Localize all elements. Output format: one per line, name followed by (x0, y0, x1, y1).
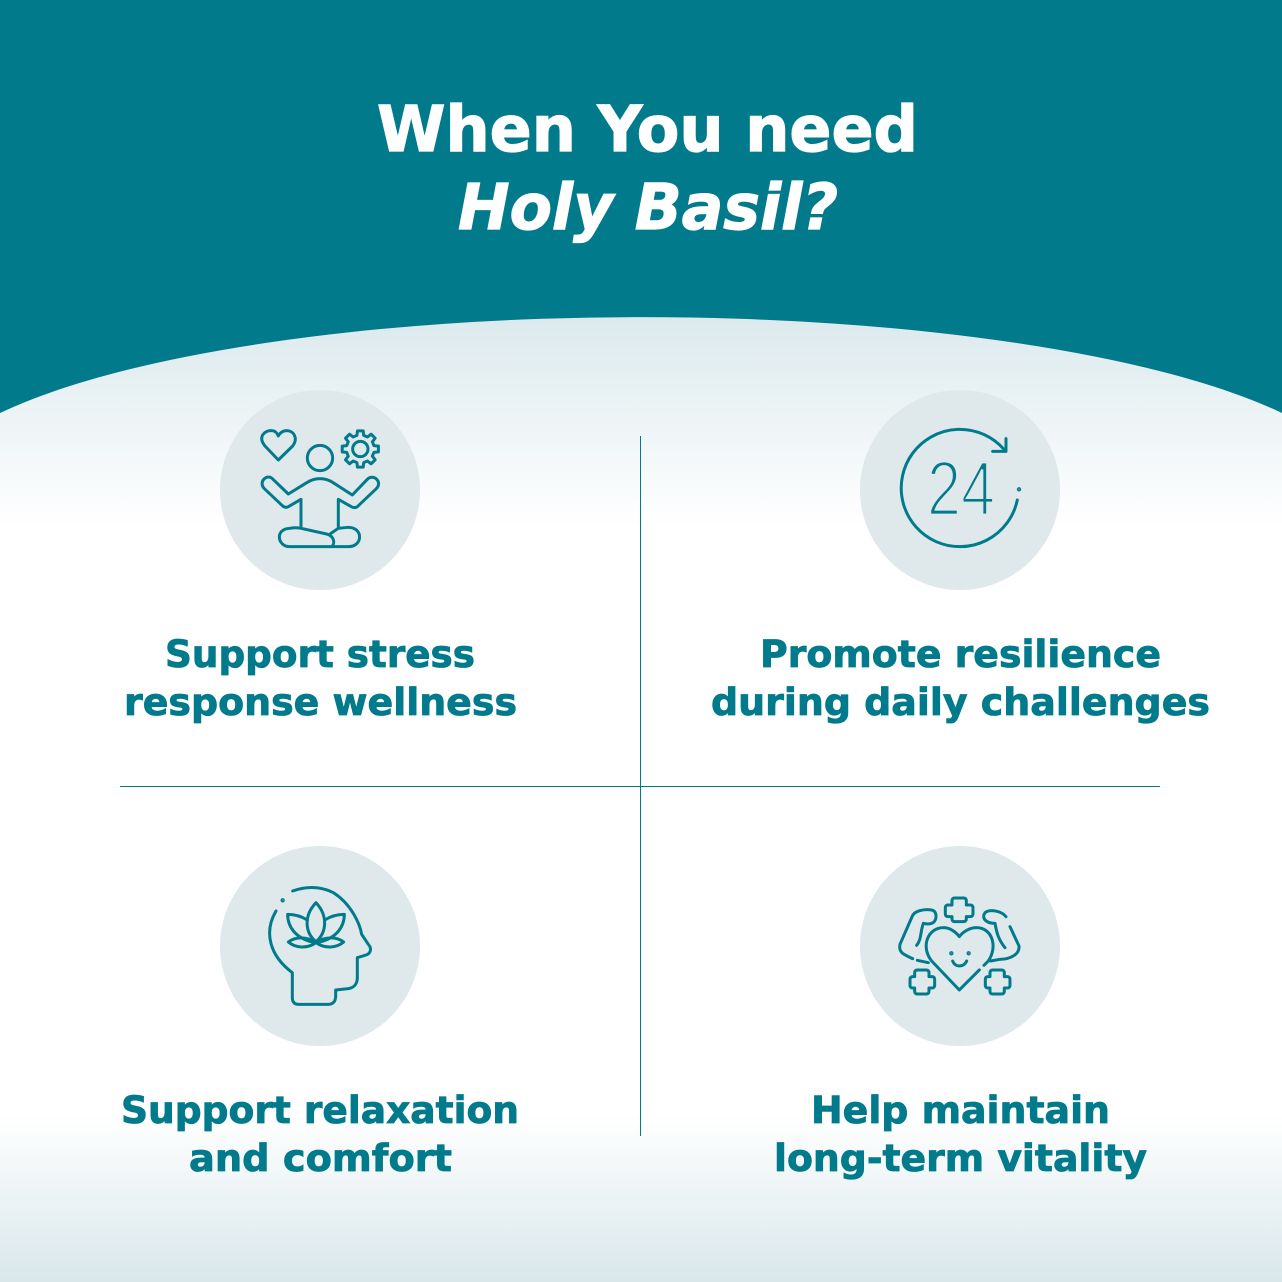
icon: flexing heart with plus signs (860, 846, 1060, 1046)
text: stress response (124, 633, 517, 724)
panel: vitality (774, 846, 1147, 1180)
text: relaxation (121, 1089, 519, 1180)
icon: 24-hour cycle: 24 (927, 446, 995, 532)
icon: meditating person with heart and gear (220, 390, 420, 590)
panel: resilience (711, 390, 1210, 724)
text: stress response: Support stress (165, 633, 475, 676)
panel: stress response (124, 390, 517, 724)
title: Holy Basil? (458, 171, 838, 244)
vertical divider (640, 436, 641, 1136)
header band with curved edge (0, 0, 1282, 413)
icon: 24-hour cycle (860, 390, 1060, 590)
text: resilience: Promote resilience (760, 633, 1161, 676)
text: vitality: long-term vitality (774, 1137, 1147, 1180)
text: resilience: during daily challenges (711, 681, 1210, 724)
text: relaxation: Support relaxation (121, 1089, 519, 1132)
text: vitality: Help maintain (811, 1089, 1110, 1132)
horizontal divider (120, 786, 1160, 787)
title: When You need (377, 93, 918, 166)
text: stress response: response wellness (124, 681, 517, 724)
icon: head with lotus (220, 846, 420, 1046)
text: relaxation: and comfort (189, 1137, 452, 1180)
text: resilience (711, 633, 1210, 724)
text: vitality (774, 1089, 1147, 1180)
panel: relaxation (121, 846, 519, 1180)
title (377, 93, 918, 244)
